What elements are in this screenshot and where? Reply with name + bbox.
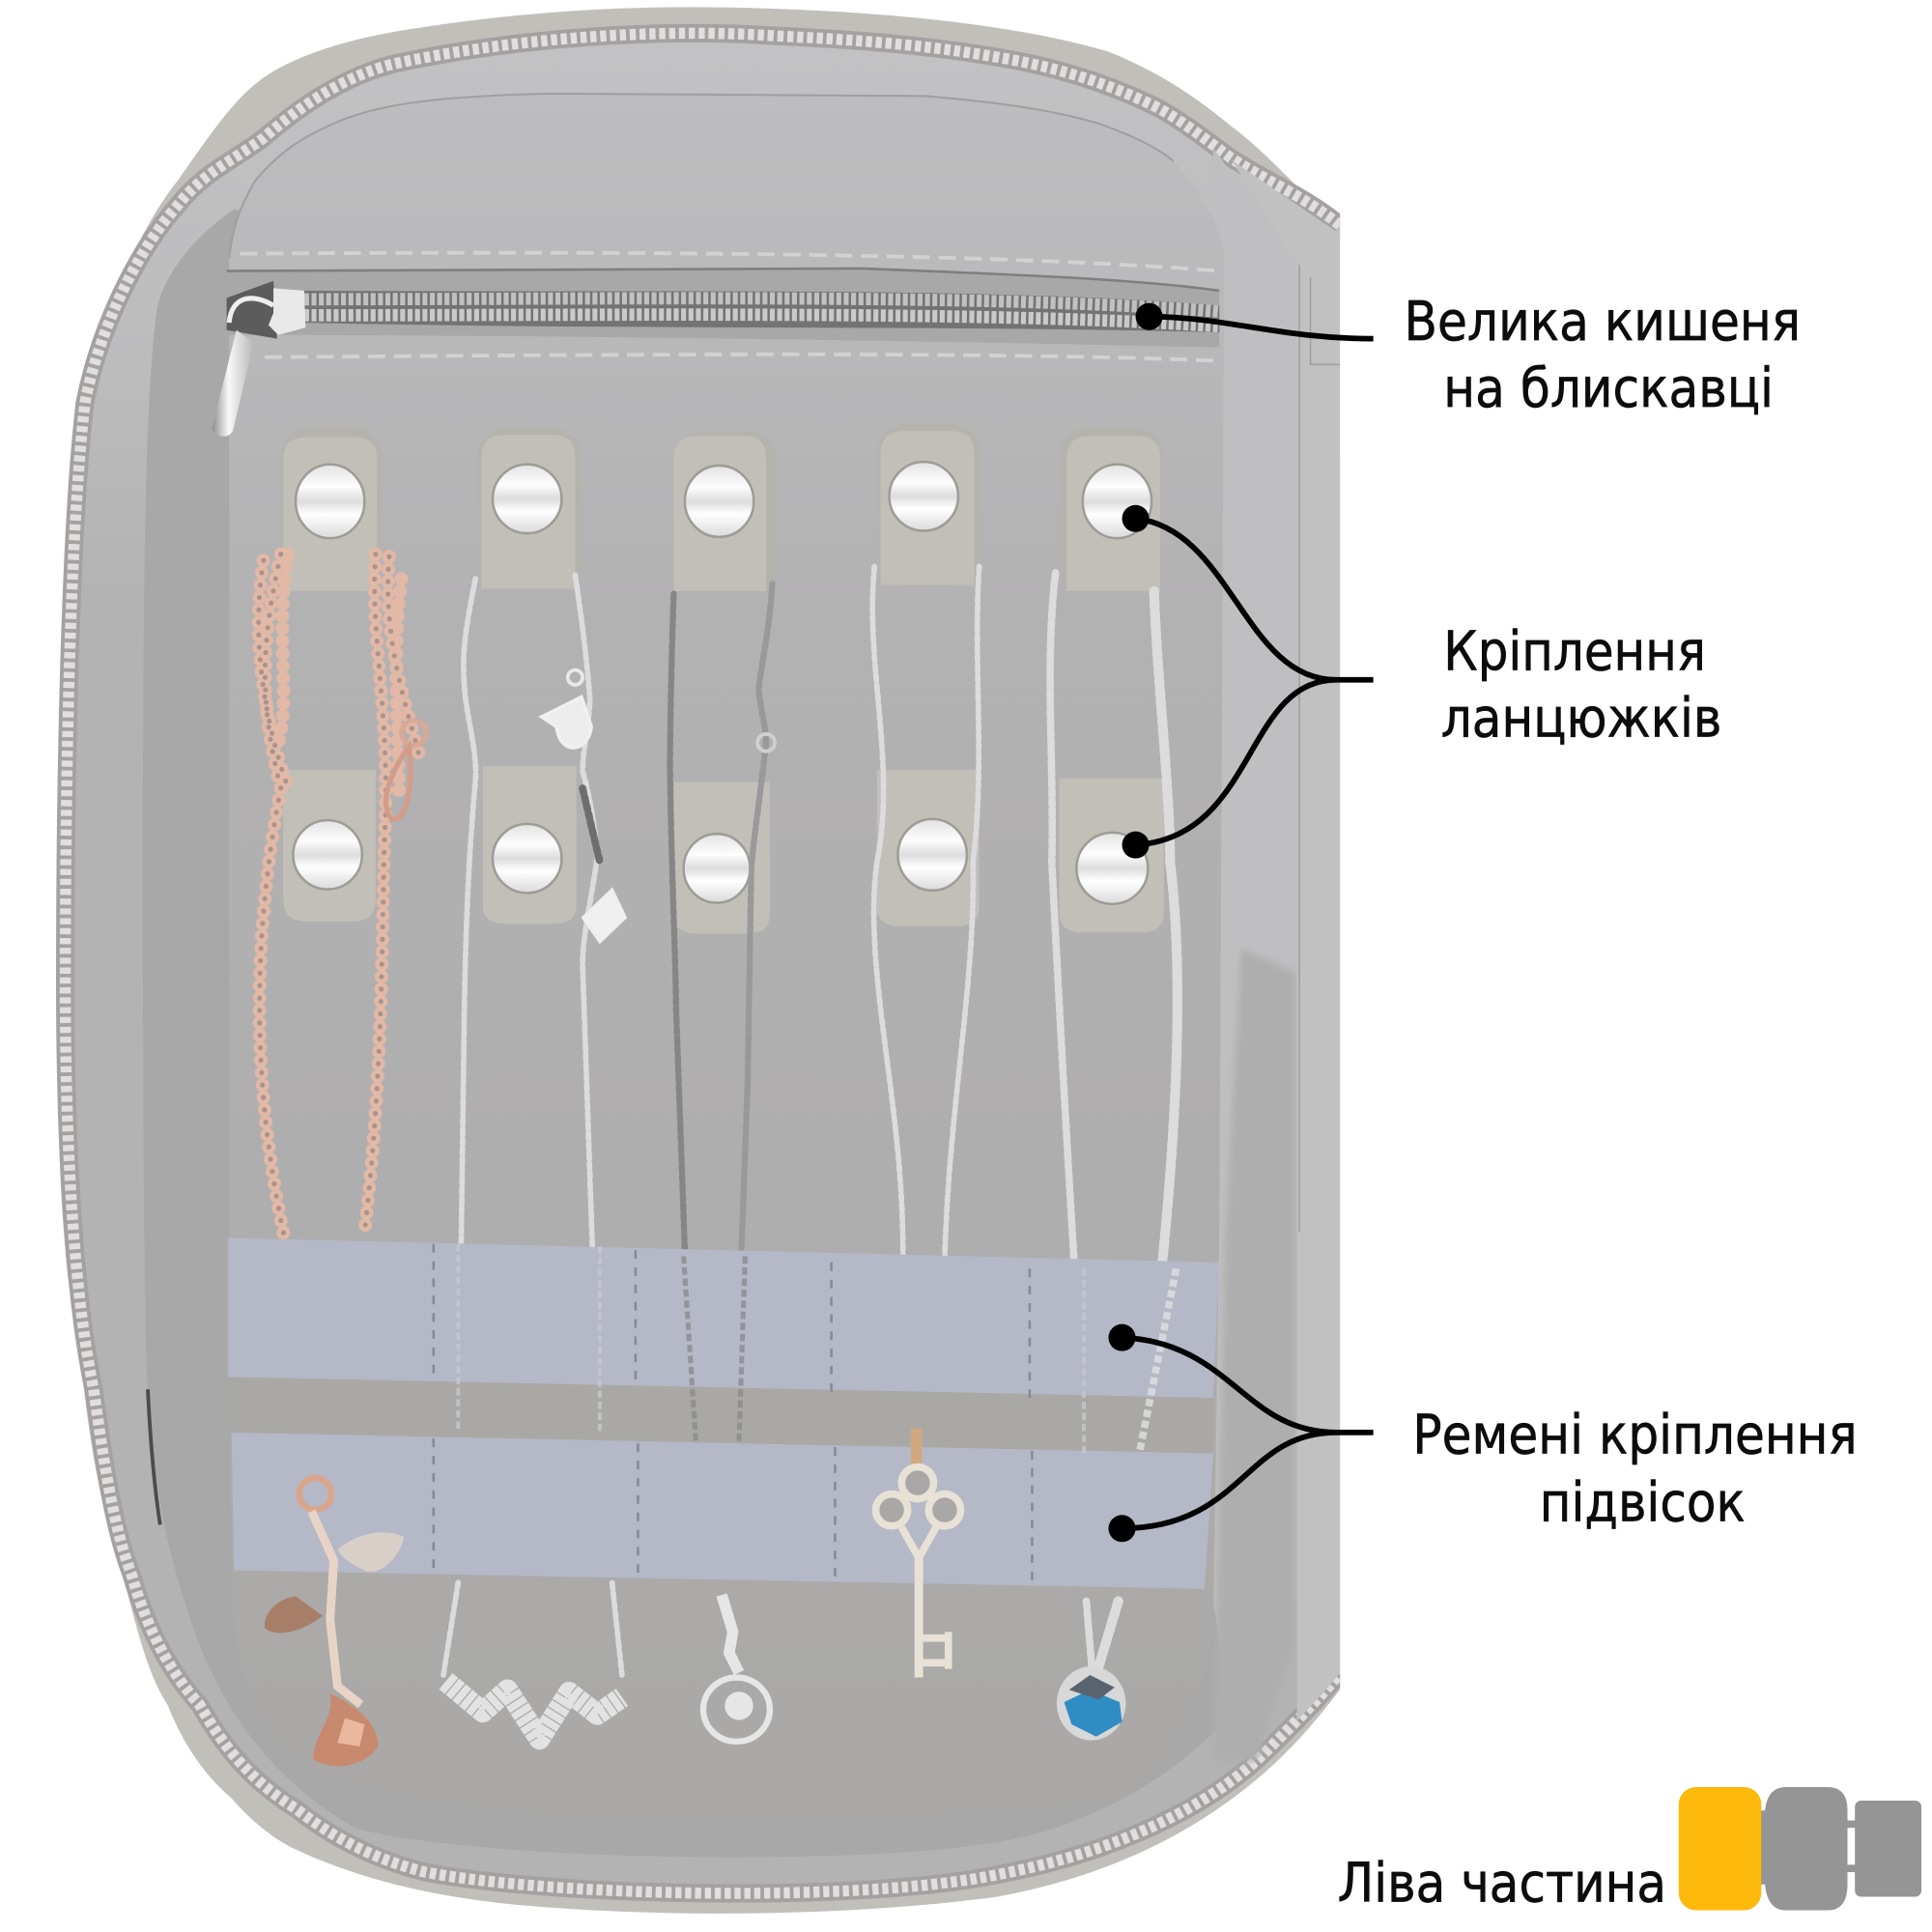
pendant straps: [228, 1237, 1219, 1589]
hinge bars: [1845, 1820, 1858, 1872]
inner panel: [229, 211, 1223, 1603]
rose gold chains: [259, 554, 426, 1484]
right edge detail: [1299, 265, 1340, 1232]
bracket leader: [1122, 1338, 1374, 1528]
icon: three-part organiser with left part highlighted: [1679, 1787, 1921, 1911]
callout: chain mounts: [1122, 505, 1706, 859]
leader dots: [1109, 1324, 1136, 1542]
leader dots: [1122, 505, 1150, 859]
yellow left segment: [1679, 1787, 1761, 1911]
dark silver chains: [670, 583, 772, 1441]
chains: [259, 554, 1178, 1675]
key pendant: [876, 1429, 960, 1678]
left gutter dark fold: [148, 1389, 160, 1524]
chain tabs: [281, 424, 1164, 933]
callout: pendant straps: [1109, 1324, 1858, 1542]
leader dot: [1136, 303, 1163, 330]
panel top seam: [229, 94, 1174, 257]
rivets: [293, 462, 1151, 904]
inner lining: [66, 33, 1340, 1893]
jewellery organiser photo: [57, 7, 1340, 1914]
label text: Велика кишеня: [1404, 291, 1801, 354]
right edge strip: [1232, 160, 1340, 1724]
swan pendant: [703, 1595, 770, 1742]
dark rope clasp section: [582, 788, 600, 862]
silver chains: [443, 566, 1178, 1675]
blue gem pendant: [1057, 1666, 1125, 1741]
right velvet shading: [1213, 949, 1297, 1761]
label text line 2: на блискавці: [1443, 357, 1774, 420]
leader line: [1150, 317, 1374, 339]
label text line 2: підвісок: [1540, 1472, 1746, 1535]
outer zipper: [66, 33, 1340, 1893]
bag outer shell: [57, 7, 1340, 1914]
label text line 2: ланцюжків: [1441, 687, 1721, 750]
toggle clasp charm: [542, 697, 591, 748]
heart tag charm: [582, 890, 626, 942]
butterfly necklace: [446, 1681, 622, 1739]
right gutter: [1213, 148, 1297, 1724]
label text: Ремені кріплення: [1412, 1404, 1858, 1466]
right segment: [1855, 1801, 1921, 1897]
pocket zipper: [212, 253, 1219, 437]
callout: zipper pocket: [1136, 291, 1801, 354]
bracket leader: [1136, 519, 1374, 845]
rose pendant: [265, 1478, 404, 1766]
middle segment: [1759, 1787, 1847, 1911]
part caption: Ліва частина: [1338, 1853, 1666, 1916]
label text: Кріплення: [1443, 621, 1706, 684]
velvet gutter: [143, 210, 1246, 1858]
pendants: [265, 1429, 1125, 1766]
